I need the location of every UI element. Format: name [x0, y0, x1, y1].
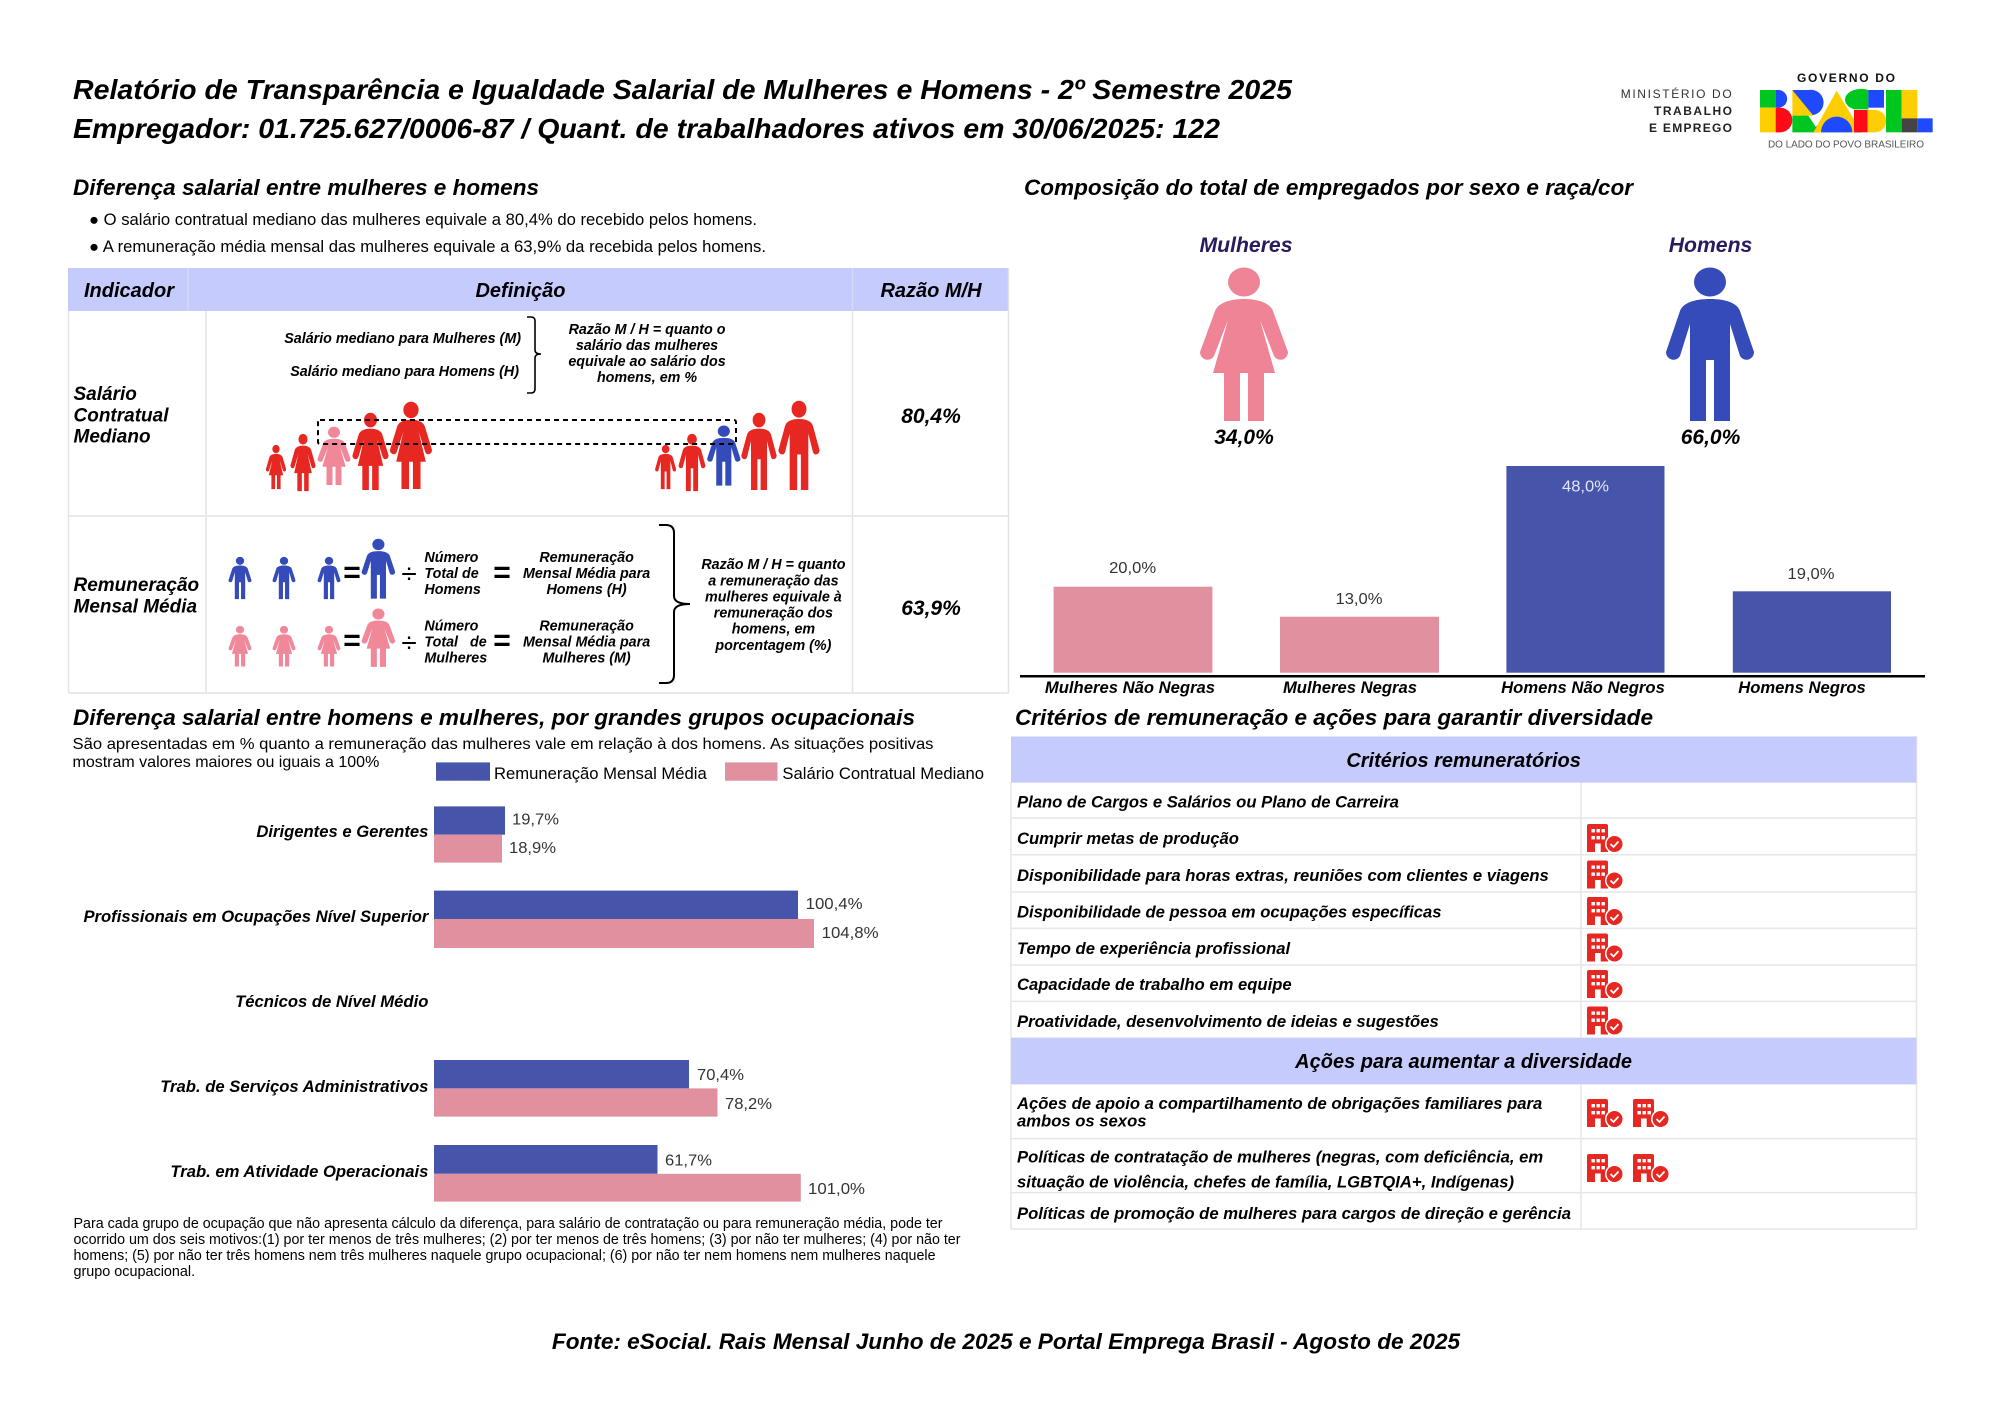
bar chart: sex and race: 48,0% [1562, 479, 1609, 496]
row: plano de cargos: Plano de Cargos e Salários ou Plano de Carreira [1017, 793, 1399, 812]
row: horas extras: Disponibilidade para horas extras, reuniões com clientes e viagens [1017, 866, 1549, 885]
table header: Razão M/H [880, 280, 982, 302]
bar chart: sex and race: Homens Negros [1738, 678, 1866, 697]
heading: composição: Composição do total de empregados por sexo e raça/cor [1024, 175, 1634, 200]
panel: women share [1199, 234, 1293, 449]
band: critérios remuneratórios: Critérios remuneratórios [1346, 750, 1581, 772]
bar chart: sex and race [1020, 466, 1925, 697]
panel: women share: 34,0% [1214, 426, 1274, 449]
text block: footnote: Para cada grupo de ocupação que não apresenta cálculo da diferença, para salário de contratação ou para remuneração média, pode ter [74, 1216, 943, 1232]
formula: men: = [493, 556, 511, 589]
group: serviços administrativos [160, 1060, 772, 1117]
row: ocupações específicas: Disponibilidade de pessoa em ocupações específicas [1017, 902, 1442, 921]
bar chart: sex and race: Mulheres Negras [1283, 678, 1417, 697]
text: razão definition: equivale ao salário dos [568, 354, 726, 370]
logo: Ministério do Trabalho e Emprego [1621, 86, 1732, 135]
panel: women share: Mulheres [1199, 234, 1293, 257]
row: compartilhamento: Ações de apoio a compartilhamento de obrigações familiares para [1016, 1094, 1542, 1113]
bar chart: sex and race: 13,0% [1336, 591, 1382, 608]
table header: Definição [475, 280, 566, 302]
logo: Governo do Brasil: DO LADO DO POVO BRASILEIRO [1768, 140, 1924, 150]
formula: women: Mensal Média para [523, 635, 650, 651]
text block: footnote: grupo ocupacional. [74, 1264, 195, 1280]
row: salário contratual mediano: Salário [74, 384, 137, 405]
group: atividade operacionais: 61,7% [665, 1152, 712, 1170]
row: equipe [1017, 970, 1624, 1000]
logo: Ministério do Trabalho e Emprego: MINISTÉRIO DO [1621, 86, 1732, 101]
group: serviços administrativos: 70,4% [697, 1067, 744, 1084]
bar chart: occupational groups [83, 806, 879, 1202]
row: contratação [1017, 1148, 1670, 1192]
heading: critérios: Critérios de remuneração e ações para garantir diversidade [1015, 705, 1653, 730]
legend: Salário Contratual Mediano [782, 764, 984, 783]
row: contratação: situação de violência, chefes de família, LGBTQIA+, Indígenas) [1017, 1173, 1515, 1192]
dashed median box [318, 420, 736, 444]
group: serviços administrativos: 78,2% [725, 1096, 772, 1113]
group: dirigentes e gerentes [256, 806, 559, 863]
row: metas [1017, 824, 1624, 854]
band: critérios remuneratórios [1011, 736, 1916, 782]
text: razão definition: remuneração dos [714, 606, 833, 622]
row: experiência: Tempo de experiência profissional [1017, 939, 1290, 958]
group: profissionais: Profissionais em Ocupações Nível Superior [83, 907, 430, 926]
group: profissionais [83, 891, 879, 948]
bar chart: sex and race: 20,0% [1109, 560, 1156, 577]
formula: men: = [343, 556, 361, 589]
row: salário contratual mediano: Salário mediano para Mulheres (M) [284, 331, 521, 347]
row: compartilhamento [1016, 1094, 1670, 1131]
text: razão definition: Razão M / H = quanto [701, 557, 846, 573]
row: horas extras [1017, 860, 1624, 890]
panel: men share: Homens [1669, 234, 1753, 257]
row: experiência [1017, 934, 1624, 963]
row: promoção: Políticas de promoção de mulheres para cargos de direção e gerência [1017, 1204, 1571, 1223]
text block: footnote: ocorrido um dos seis motivos:(1) por ter menos de três mulheres; (2) por ter menos de três homens; (3) por não ter mulheres; (4) por não ter [74, 1232, 961, 1248]
formula: men: Remuneração [539, 550, 634, 566]
logo: Ministério do Trabalho e Emprego: TRABALHO [1654, 104, 1732, 118]
row: proatividade: Proatividade, desenvolvimento de ideias e sugestões [1017, 1012, 1439, 1031]
formula: women: de [470, 635, 487, 651]
legend [436, 762, 984, 783]
formula: women: = [493, 624, 511, 657]
text: razão definition: homens, em % [597, 370, 697, 386]
row: compartilhamento: ambos os sexos [1017, 1112, 1146, 1131]
row: ocupações específicas [1017, 897, 1624, 926]
band: ações: Ações para aumentar a diversidade [1294, 1051, 1632, 1073]
formula: men [229, 539, 650, 599]
text: razão definition: Razão M / H = quanto o [569, 322, 726, 338]
row: equipe: Capacidade de trabalho em equipe [1017, 975, 1292, 994]
row: salário contratual mediano: Mediano [74, 426, 151, 448]
text block: footnote: homens; (5) por não ter três homens nem três mulheres naquele grupo ocupacional; (6) por não ter nem homens nem mulheres naquele [74, 1248, 936, 1264]
text: razão definition: mulheres equivale à [705, 590, 842, 606]
group: profissionais: 100,4% [806, 896, 863, 913]
text: razão definition: homens, em [732, 622, 815, 638]
formula: women: = [343, 624, 361, 657]
row: remuneração mensal média: Remuneração [74, 575, 199, 596]
title: Relatório de Transparência e Igualdade Salarial de Mulheres e Homens - 2º Semestre 2025 [73, 74, 1292, 105]
formula: men: Homens [424, 582, 481, 598]
group: profissionais: 104,8% [822, 925, 879, 942]
source line: Fonte: eSocial. Rais Mensal Junho de 2025 e Portal Emprega Brasil - Agosto de 2025 [552, 1329, 1461, 1354]
row: metas: Cumprir metas de produção [1017, 829, 1239, 848]
text block: chart description: mostram valores maiores ou iguais a 100% [72, 754, 379, 771]
row: proatividade [1017, 1006, 1624, 1036]
table header [68, 268, 1009, 311]
formula: women: Mulheres (M) [543, 651, 631, 667]
formula: women: Mulheres [424, 651, 487, 667]
formula: women: ÷ [401, 627, 417, 658]
group: dirigentes e gerentes: Dirigentes e Gerentes [256, 822, 428, 841]
formula: men: ÷ [401, 558, 417, 589]
formula: women: Remuneração [539, 619, 634, 635]
bar chart: sex and race: Homens Não Negros [1501, 678, 1665, 697]
logo: Governo do Brasil [1760, 71, 1933, 150]
panel: men share [1666, 234, 1754, 449]
formula: women: Total [424, 635, 459, 651]
row: contratação: Políticas de contratação de mulheres (negras, com deficiência, em [1017, 1148, 1543, 1166]
text: razão definition: salário das mulheres [576, 338, 718, 354]
group: técnicos: Técnicos de Nível Médio [235, 992, 428, 1011]
row: salário contratual mediano: Salário mediano para Homens (H) [290, 364, 519, 380]
panel: criteria table [1011, 736, 1916, 1229]
heading: diferença salarial: Diferença salarial entre mulheres e homens [73, 175, 539, 200]
value: 63,9%: 63,9% [901, 597, 961, 620]
group: atividade operacionais: 101,0% [808, 1181, 865, 1198]
group: dirigentes e gerentes: 18,9% [509, 840, 556, 857]
brace [527, 317, 541, 393]
icons: women ordered by salary [266, 402, 432, 491]
formula: men: Total de [424, 566, 479, 582]
row: remuneração mensal média: Mensal Média [74, 596, 197, 618]
bullet text block [89, 211, 766, 256]
group: serviços administrativos: Trab. de Serviços Administrativos [160, 1077, 428, 1096]
heading: grupos ocupacionais: Diferença salarial entre homens e mulheres, por grandes grupos ocupacionais [73, 705, 915, 730]
panel: men share: 66,0% [1681, 426, 1741, 449]
icons: men ordered by salary [655, 401, 820, 491]
band: ações [1011, 1038, 1916, 1084]
value: 80,4%: 80,4% [901, 405, 961, 428]
bullet text block: ● O salário contratual mediano das mulheres equivale a 80,4% do recebido pelos homens. [89, 211, 757, 229]
formula: women: Número [424, 619, 479, 635]
formula: men: Número [424, 550, 479, 566]
text: razão definition: a remuneração das [708, 574, 839, 590]
text block: chart description: São apresentadas em % quanto a remuneração das mulheres vale em relação à dos homens. As situações positivas [72, 736, 933, 753]
bar chart: sex and race: 19,0% [1788, 566, 1834, 583]
title: Empregador: 01.725.627/0006-87 / Quant. de trabalhadores ativos em 30/06/2025: 122 [73, 113, 1220, 144]
panel: indicator table [68, 268, 1009, 693]
logo: Governo do Brasil: GOVERNO DO [1797, 71, 1895, 85]
text: razão definition: porcentagem (%) [714, 638, 832, 654]
table header: Indicador [84, 280, 175, 302]
row: remuneração mensal média [74, 525, 961, 683]
formula: women [229, 609, 650, 667]
formula: men: Homens (H) [546, 582, 627, 598]
row: salário contratual mediano [74, 317, 961, 491]
logo: Ministério do Trabalho e Emprego: E EMPREGO [1649, 121, 1732, 135]
bullet text block: ● A remuneração média mensal das mulheres equivale a 63,9% da recebida pelos homens. [89, 238, 766, 256]
legend: Remuneração Mensal Média [494, 764, 707, 783]
group: dirigentes e gerentes: 19,7% [512, 812, 559, 828]
brace [659, 525, 690, 683]
group: atividade operacionais: Trab. em Atividade Operacionais [170, 1162, 428, 1181]
row: salário contratual mediano: Contratual [74, 406, 169, 426]
group: atividade operacionais [170, 1145, 865, 1202]
bar chart: sex and race: Mulheres Não Negras [1045, 678, 1215, 697]
title [73, 74, 1292, 144]
formula: men: Mensal Média para [523, 566, 650, 582]
